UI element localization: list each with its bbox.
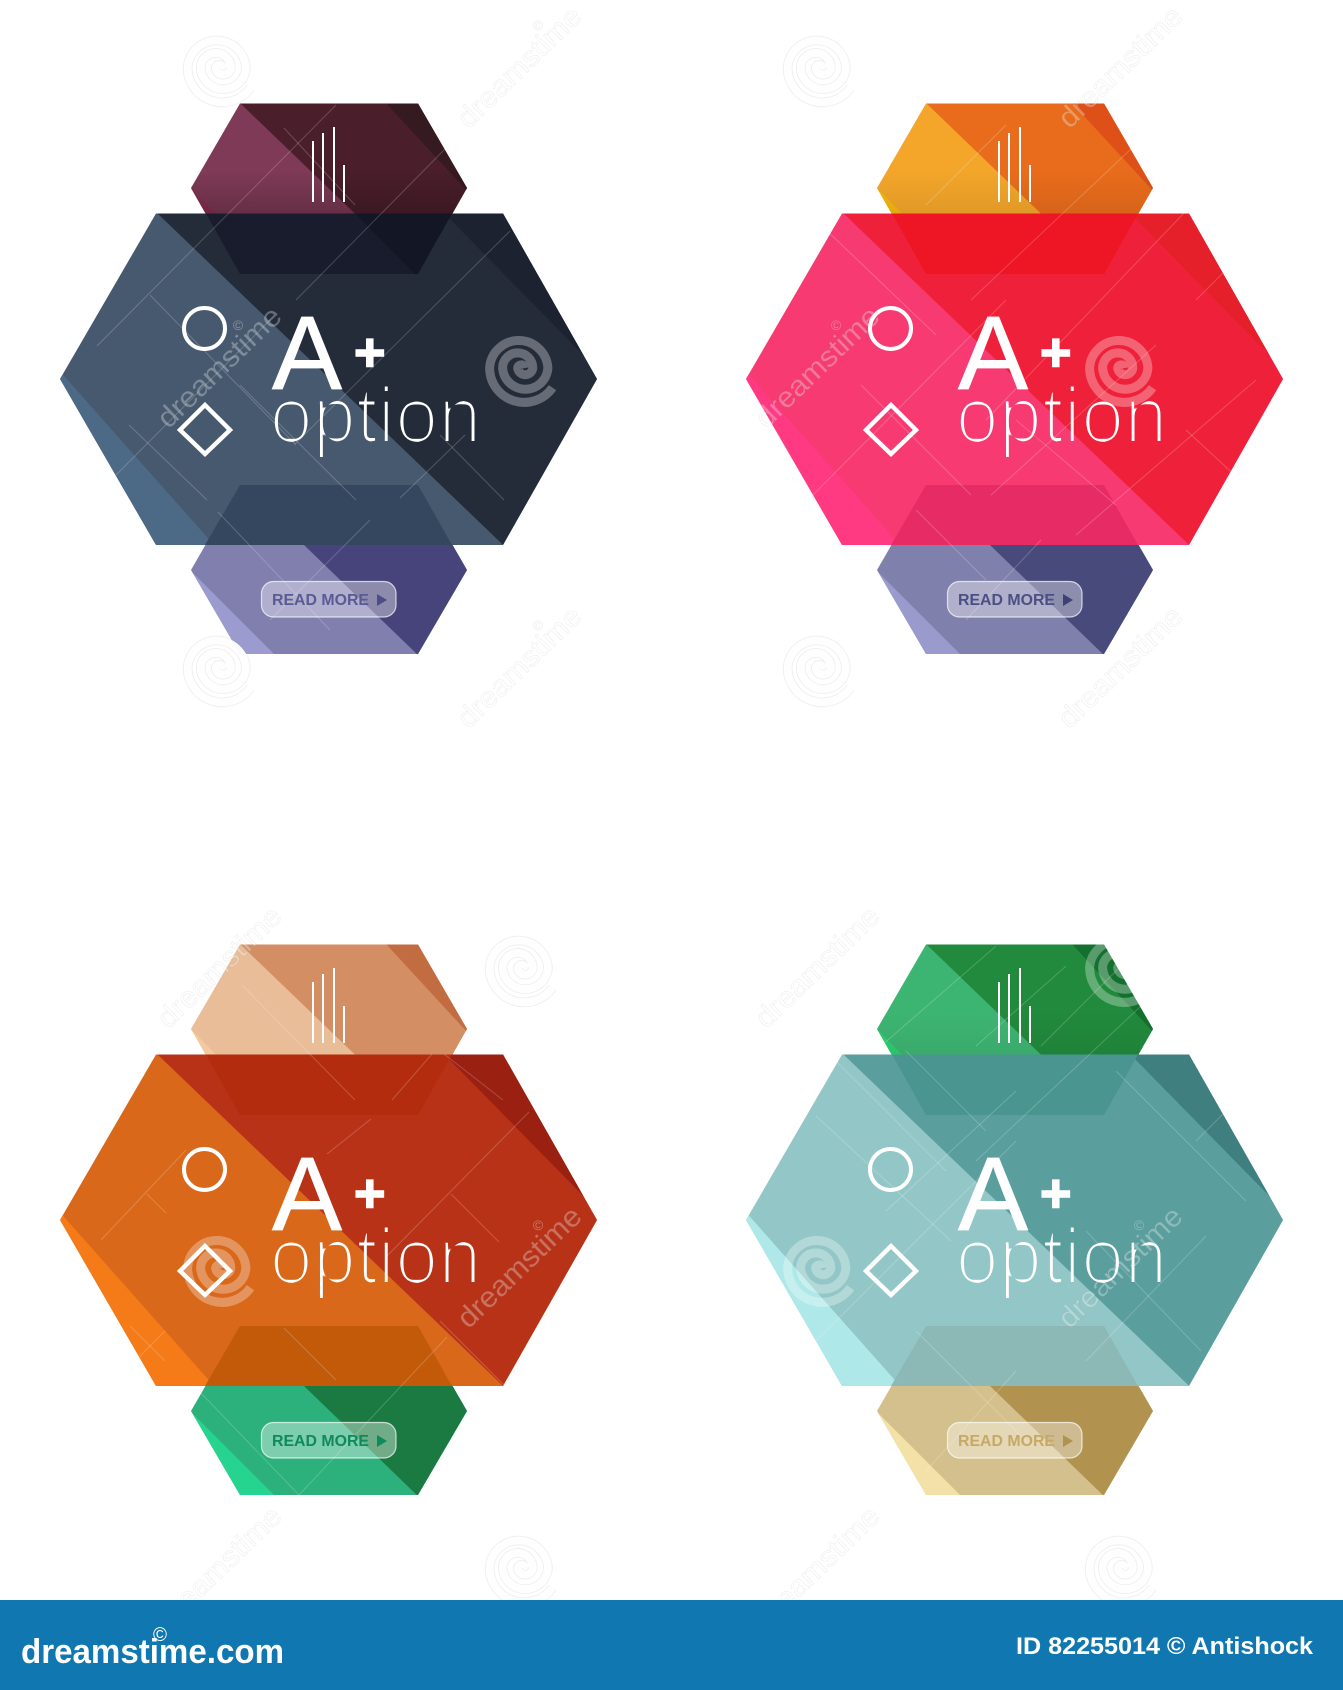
button: read more xyxy=(262,1422,396,1458)
watermark text: © xyxy=(831,317,842,333)
heading: A+: A xyxy=(272,1136,342,1253)
main hexagon: crimson xyxy=(746,214,1283,545)
panel: dark slate hexagon xyxy=(60,104,597,654)
thin guide lines xyxy=(97,105,510,630)
top hexagon: maroon xyxy=(191,104,467,214)
top overlap trapezoid xyxy=(892,1054,1138,1115)
heading: option: option xyxy=(270,1212,482,1300)
thin guide lines xyxy=(101,985,529,1495)
button: read more xyxy=(948,1422,1082,1458)
icon: diamond xyxy=(866,1246,916,1295)
watermark text: dreamstime xyxy=(749,900,886,1035)
watermark text: dreamstime xyxy=(749,1500,886,1635)
bottom overlap trapezoid xyxy=(891,485,1138,545)
bottom overlap trapezoid xyxy=(205,485,452,545)
heading: plus: + xyxy=(1040,1164,1072,1224)
button: read more: READ MORE xyxy=(958,592,1055,609)
bottom overlap trapezoid xyxy=(205,1326,452,1386)
top hexagon: orange xyxy=(877,104,1153,214)
watermark text: dreamstime xyxy=(451,0,588,135)
icon: bars xyxy=(313,127,344,202)
watermark text: dreamstime xyxy=(151,300,288,435)
watermark text: dreamstime xyxy=(151,1500,288,1635)
button: read more: READ MORE xyxy=(272,592,369,609)
icon: circle xyxy=(184,308,225,349)
top overlap trapezoid xyxy=(892,214,1138,274)
watermark text: dreamstime xyxy=(151,900,288,1035)
main hexagon: teal xyxy=(746,1054,1283,1386)
watermark text: © xyxy=(233,317,244,333)
watermark text: dreamstime xyxy=(749,300,886,435)
icon: bars xyxy=(313,968,344,1043)
heading: option: option xyxy=(956,371,1168,459)
icon: circle xyxy=(870,1149,911,1190)
watermark text: dreamstime xyxy=(451,1200,588,1335)
icon: bars xyxy=(999,968,1030,1043)
button: read more: READ MORE xyxy=(958,1433,1055,1450)
bottom overlap trapezoid xyxy=(891,1326,1138,1386)
watermark spirals on panels xyxy=(188,341,1153,1302)
panel: rust hexagon xyxy=(60,944,597,1495)
watermark text: © xyxy=(533,617,544,633)
footer bar xyxy=(0,1600,1343,1690)
heading: option: option xyxy=(956,1212,1168,1300)
footer credit: ID 82255014 © Antishock xyxy=(1016,1633,1314,1660)
heading: option: option xyxy=(270,371,482,459)
icon: circle xyxy=(870,308,911,349)
panel: crimson hexagon xyxy=(746,104,1283,654)
bottom hexagon: indigo xyxy=(877,545,1153,654)
top overlap trapezoid xyxy=(206,214,452,274)
heading: plus: + xyxy=(354,322,386,382)
main hexagon: slate xyxy=(60,214,597,545)
watermark text: © xyxy=(533,1217,544,1233)
button: read more xyxy=(262,582,396,617)
heading: A+: A xyxy=(272,295,342,412)
button: read more: READ MORE xyxy=(272,1433,369,1450)
watermark text: dreamstime xyxy=(1052,600,1189,735)
watermark text: dreamstime xyxy=(451,600,588,735)
panel: teal hexagon xyxy=(746,944,1283,1495)
heading: A+: A xyxy=(958,1136,1028,1253)
icon: diamond xyxy=(866,405,916,454)
watermark text: dreamstime xyxy=(1052,0,1189,135)
main hexagon: rust xyxy=(60,1054,597,1386)
bottom hexagon: green xyxy=(191,1386,467,1495)
heading: plus: + xyxy=(354,1164,386,1224)
top overlap trapezoid xyxy=(206,1054,452,1115)
icon: diamond xyxy=(180,405,230,454)
heading: A+: A xyxy=(958,295,1028,412)
watermark spirals on white xyxy=(188,41,1153,1602)
bottom hexagon: purple xyxy=(191,545,467,654)
top hexagon: peach xyxy=(191,944,467,1054)
button: read more xyxy=(948,582,1082,617)
icon: bars xyxy=(999,127,1030,202)
bottom hexagon: sand xyxy=(877,1386,1153,1495)
footer logo swirl: © xyxy=(153,1625,167,1646)
thin guide lines xyxy=(808,125,1261,620)
watermark text: © xyxy=(533,17,544,33)
footer logo: dreamstime.com: dreamstime.com xyxy=(21,1633,284,1671)
icon: diamond xyxy=(180,1246,230,1295)
watermark text xyxy=(151,0,1189,1635)
icon: circle xyxy=(184,1149,225,1190)
heading: plus: + xyxy=(1040,322,1072,382)
watermark text: dreamstime xyxy=(1052,1200,1189,1335)
watermark text: © xyxy=(1134,1217,1145,1233)
top hexagon: green xyxy=(877,944,1153,1054)
thin guide lines xyxy=(816,941,1276,1471)
